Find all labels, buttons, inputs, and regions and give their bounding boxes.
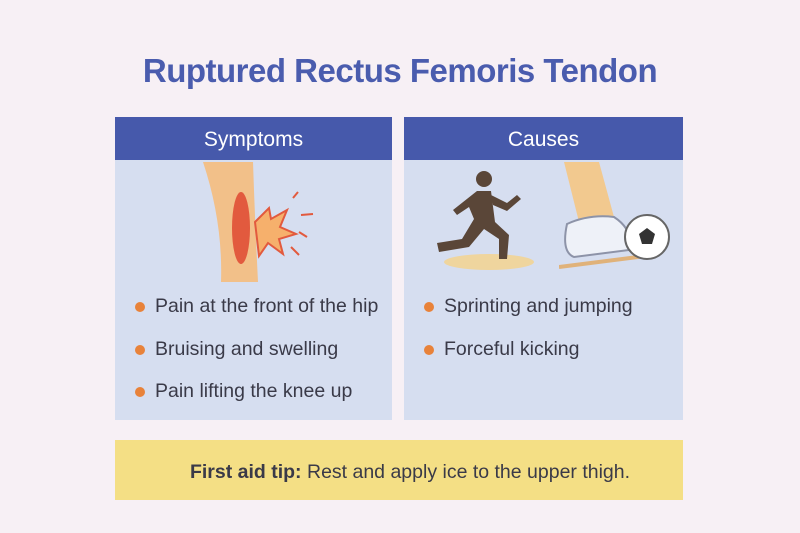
heading: symptoms	[115, 117, 392, 160]
cause list: Forceful kicking	[444, 338, 579, 360]
panel: symptoms	[115, 117, 392, 420]
callout: first aid tip: First aid tip: Rest and apply ice to the upper thigh.	[190, 461, 630, 483]
heading: causes: Causes	[508, 128, 579, 151]
panel: causes	[404, 117, 683, 420]
title: Ruptured Rectus Femoris Tendon	[143, 52, 657, 89]
cause list	[424, 295, 633, 360]
symptom list: Pain at the front of the hip	[155, 295, 378, 317]
heading: causes	[404, 117, 683, 160]
cause list: Sprinting and jumping	[444, 295, 633, 317]
symptom list: Pain lifting the knee up	[155, 380, 352, 402]
symptom list: Bruising and swelling	[155, 338, 338, 360]
callout: first aid tip	[115, 440, 683, 500]
icon: kicking foot with ball	[559, 162, 670, 269]
icon: runner	[437, 171, 534, 270]
icon: injured thigh	[203, 162, 314, 282]
heading: symptoms: Symptoms	[204, 128, 303, 151]
symptom list	[135, 295, 378, 402]
